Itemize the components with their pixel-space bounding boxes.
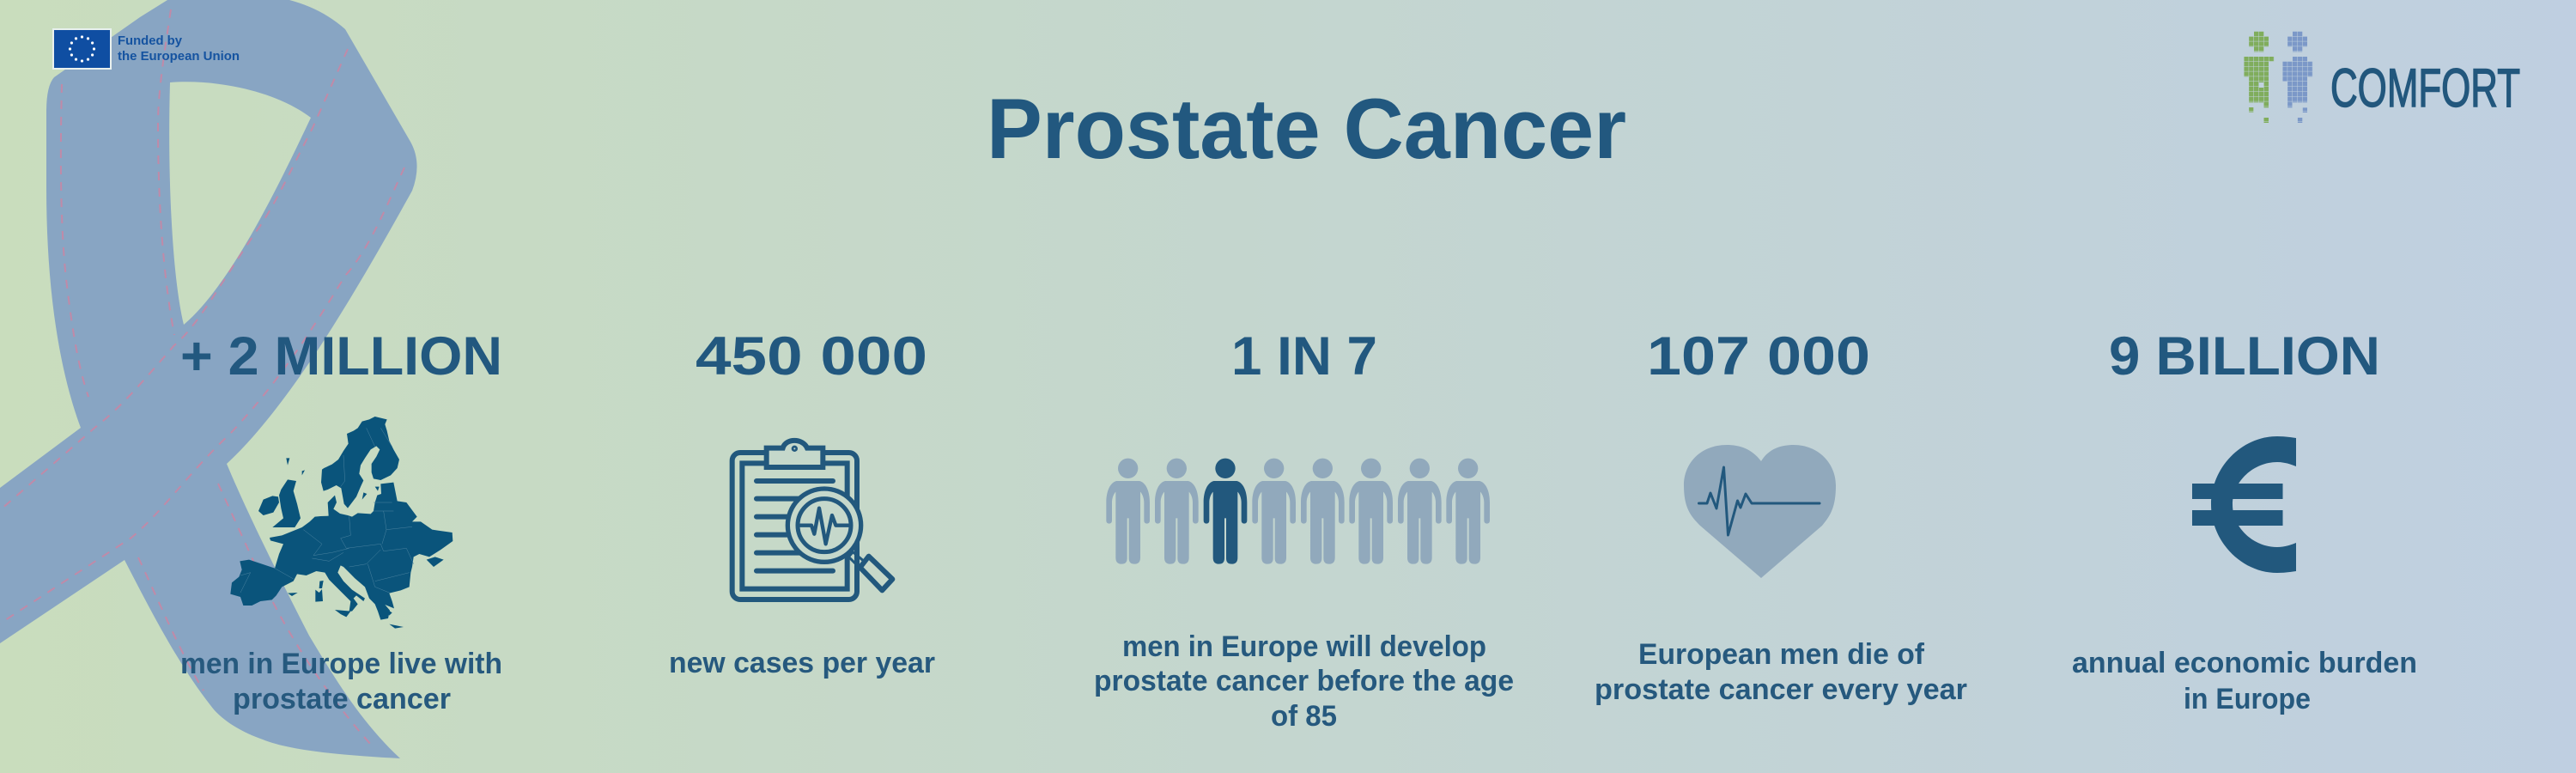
caption: prostate cancer (233, 683, 451, 715)
EU logo (53, 29, 240, 69)
icon: row of people (1106, 459, 1490, 564)
icon: clipboard with magnifier (732, 441, 892, 600)
caption: in Europe (2184, 683, 2311, 715)
caption: prostate cancer before the age (1094, 665, 1514, 697)
funding text: the European Union (118, 50, 240, 64)
caption (1595, 638, 1967, 706)
icon: EU flag (53, 29, 111, 69)
COMFORT logo (2244, 32, 2520, 123)
caption: annual economic burden (2072, 647, 2417, 679)
funding text (118, 34, 240, 64)
stat heading: 107 000 (1647, 326, 1870, 386)
caption (180, 648, 502, 715)
title: Prostate Cancer (987, 81, 1626, 176)
ribbon (0, 0, 417, 758)
stat heading: 9 BILLION (2109, 326, 2380, 386)
icon: pixel figures (2244, 32, 2312, 123)
icon: heart with ECG (1684, 445, 1836, 578)
icon: euro sign (2192, 436, 2296, 573)
caption: men in Europe live with (180, 648, 502, 680)
caption: prostate cancer every year (1595, 673, 1967, 706)
panel: 9 billion (2072, 326, 2417, 715)
funding text: Funded by (118, 34, 182, 48)
caption: men in Europe will develop (1122, 630, 1486, 663)
panel: 1 in 7 (1094, 326, 1514, 733)
caption: of 85 (1271, 700, 1337, 733)
panel: 450 000 (669, 326, 935, 679)
panel: 107 000 (1595, 326, 1967, 706)
caption (2072, 647, 2417, 715)
panel: 2 million (180, 326, 502, 715)
icon: map of Europe (230, 417, 453, 629)
caption: new cases per year (669, 647, 935, 679)
caption: European men die of (1638, 638, 1925, 671)
stat heading: + 2 MILLION (180, 326, 502, 386)
caption (1094, 630, 1514, 733)
stat heading: 450 000 (696, 326, 927, 386)
stat heading: 1 IN 7 (1231, 326, 1377, 386)
